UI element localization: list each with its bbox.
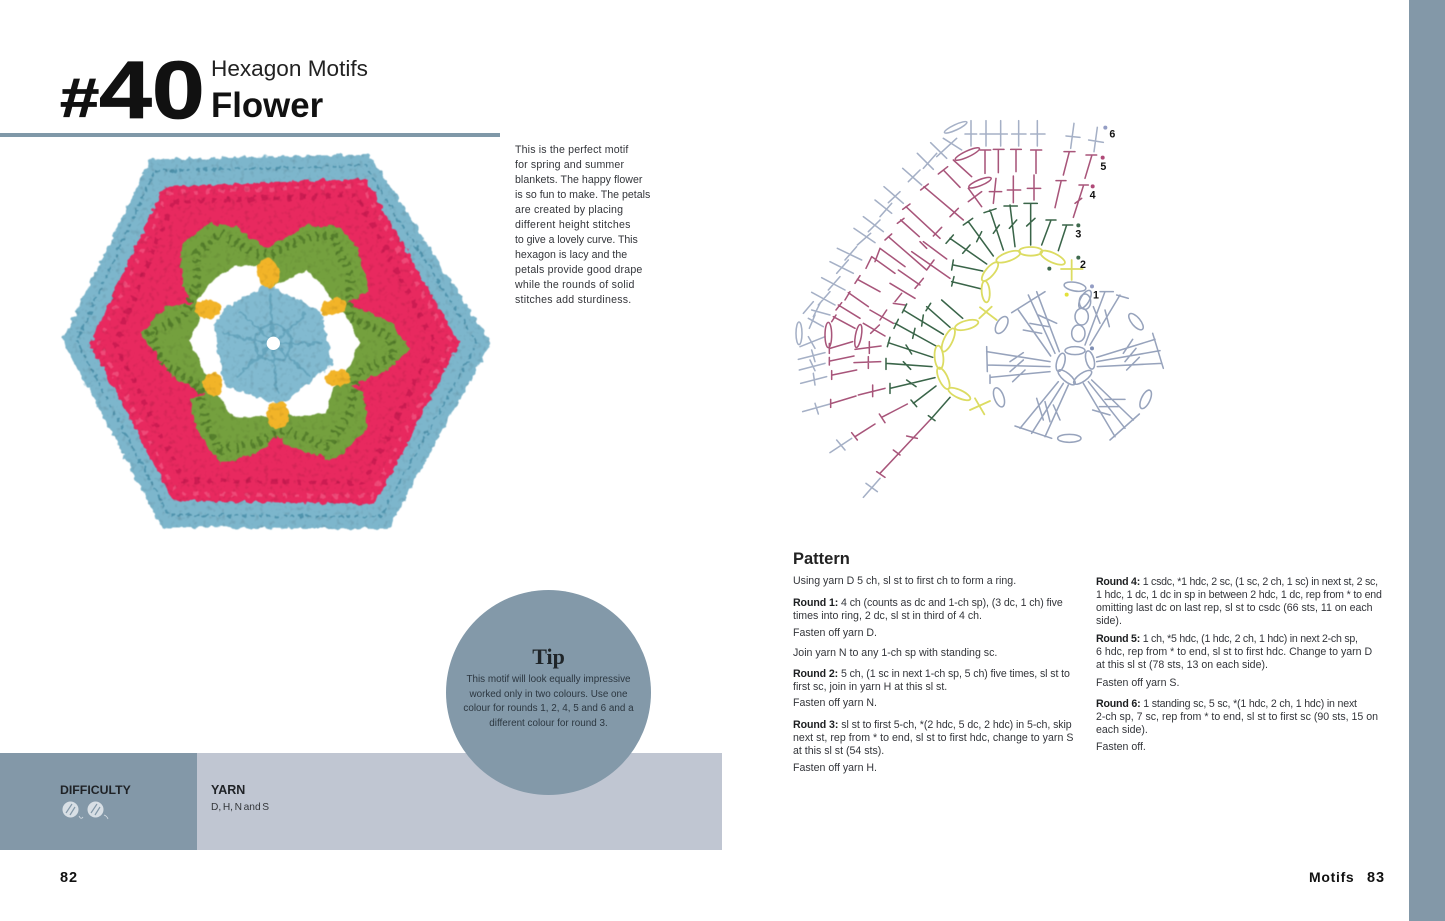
chart upper half — [803, 120, 1115, 313]
tip circle — [446, 590, 651, 795]
chart upper half: 6 — [1109, 129, 1115, 141]
pattern instructions: left column: Round 3: sl st to first 5-ch, *(2 hdc, 5 dc, 2 hdc) in 5-ch, skip — [793, 718, 1072, 730]
difficulty label: DIFFICULTY — [60, 782, 131, 796]
white openings — [190, 265, 360, 417]
pattern instructions: right column: 2-ch sp, 7 sc, rep from * to end, sl st to first sc (90 sts, 15 on — [1096, 711, 1378, 723]
title number: # — [60, 66, 99, 129]
page number right: 83 — [1367, 870, 1385, 886]
pattern instructions: left column: times into ring, 2 dc, sl st in third of 4 ch. — [793, 610, 982, 622]
chart upper half: 3 — [1075, 228, 1081, 240]
pattern instructions: right column — [1096, 576, 1382, 752]
tip text — [463, 674, 634, 728]
intro text: different height stitches — [515, 219, 631, 231]
pattern instructions: left column: Using yarn D 5 ch, sl st to first ch to form a ring. — [793, 574, 1016, 586]
running footer right: Motifs — [1309, 869, 1354, 885]
chart upper half: 2 — [1080, 259, 1086, 271]
chart upper half: 5 — [1100, 161, 1106, 173]
intro text: stitches add sturdiness. — [515, 294, 631, 306]
centre hole — [267, 337, 280, 350]
pattern heading: Pattern — [793, 550, 850, 568]
motif name heading: Flower — [211, 86, 323, 125]
pattern instructions: right column: each side). — [1096, 724, 1148, 736]
tip text: colour for rounds 1, 2, 4, 5 and 6 and a — [463, 703, 634, 714]
yarn list: D, H, N and S — [211, 802, 269, 813]
tip heading: Tip — [532, 644, 565, 669]
intro text: This is the perfect motif — [515, 144, 629, 156]
intro text: for spring and summer — [515, 159, 624, 171]
photo: crocheted hexagon motif — [61, 152, 491, 531]
pattern instructions: left column: Round 1: 4 ch (counts as dc and 1-ch sp), (3 dc, 1 ch) five — [793, 596, 1063, 608]
yarn label: YARN — [211, 782, 245, 796]
page number left: 82 — [60, 870, 78, 886]
yarn panel — [197, 753, 722, 850]
pattern instructions: right column: Round 4: 1 csdc, *1 hdc, 2 sc, (1 sc, 2 ch, 1 sc) in next st, 2 sc, — [1096, 576, 1378, 588]
intro text: to give a lovely curve. This — [515, 234, 638, 246]
pattern instructions: left column: Round 2: 5 ch, (1 sc in next 1-ch sp, 5 ch) five times, sl st to — [793, 668, 1070, 680]
pattern instructions: right column: 6 hdc, rep from * to end, sl st to first hdc. Change to yarn D — [1096, 646, 1372, 658]
pattern instructions: left column: Join yarn N to any 1-ch sp with standing sc. — [793, 646, 997, 658]
title number: 40 — [99, 45, 205, 136]
tip text: This motif will look equally impressive — [466, 674, 631, 685]
intro text: are created by placing — [515, 204, 623, 216]
pattern instructions: right column: at this sl st (78 sts, 13 on each side). — [1096, 659, 1268, 671]
flower centre and joins — [196, 259, 350, 428]
pattern instructions: right column: side). — [1096, 615, 1122, 627]
icon: two yarn balls — [62, 802, 108, 820]
pattern instructions: left column: Fasten off yarn H. — [793, 762, 877, 774]
heading rule — [0, 133, 500, 136]
pattern instructions: left column: next st, rep from * to end, sl st to first hdc, change to yarn S — [793, 732, 1073, 744]
tip text: different colour for round 3. — [489, 718, 608, 728]
pattern instructions: right column: omitting last dc on last rep, sl st to csdc (66 sts, 11 on each — [1096, 602, 1373, 614]
pattern instructions: left column: Fasten off yarn D. — [793, 626, 877, 638]
chart upper half: 1 — [1093, 289, 1099, 301]
crochet chart diagram — [795, 120, 1164, 498]
pattern instructions: right column: Fasten off yarn S. — [1096, 676, 1179, 688]
intro text: while the rounds of solid — [515, 279, 635, 291]
intro text: blankets. The happy flower — [515, 174, 642, 186]
pattern instructions: right column: Round 5: 1 ch, *5 hdc, (1 hdc, 2 ch, 1 hdc) in next 2-ch sp, — [1096, 632, 1358, 644]
intro text — [515, 144, 650, 306]
pattern instructions: left column: Fasten off yarn N. — [793, 696, 877, 708]
pattern instructions: left column: at this sl st (54 sts). — [793, 745, 884, 757]
pattern instructions: right column: 1 hdc, 1 dc, 1 dc in sp in between 2 hdc, 1 dc, rep from * to end — [1096, 589, 1382, 601]
intro text: petals provide good drape — [515, 264, 643, 276]
pattern instructions: left column: first sc, join in yarn H at this sl st. — [793, 681, 947, 693]
chart upper half: 4 — [1090, 190, 1096, 202]
chart lower half — [796, 292, 1163, 497]
right edge bar — [1409, 0, 1445, 921]
intro text: is so fun to make. The petals — [515, 189, 650, 201]
difficulty panel — [0, 753, 197, 850]
pattern instructions: right column: Fasten off. — [1096, 740, 1146, 752]
intro text: hexagon is lacy and the — [515, 249, 627, 261]
pattern instructions: right column: Round 6: 1 standing sc, 5 sc, *(1 hdc, 2 ch, 1 hdc) in next — [1096, 698, 1357, 710]
pattern instructions: left column — [793, 574, 1073, 774]
category heading: Hexagon Motifs — [211, 56, 368, 81]
tip text: worked only in two colours. Use one — [469, 688, 628, 700]
